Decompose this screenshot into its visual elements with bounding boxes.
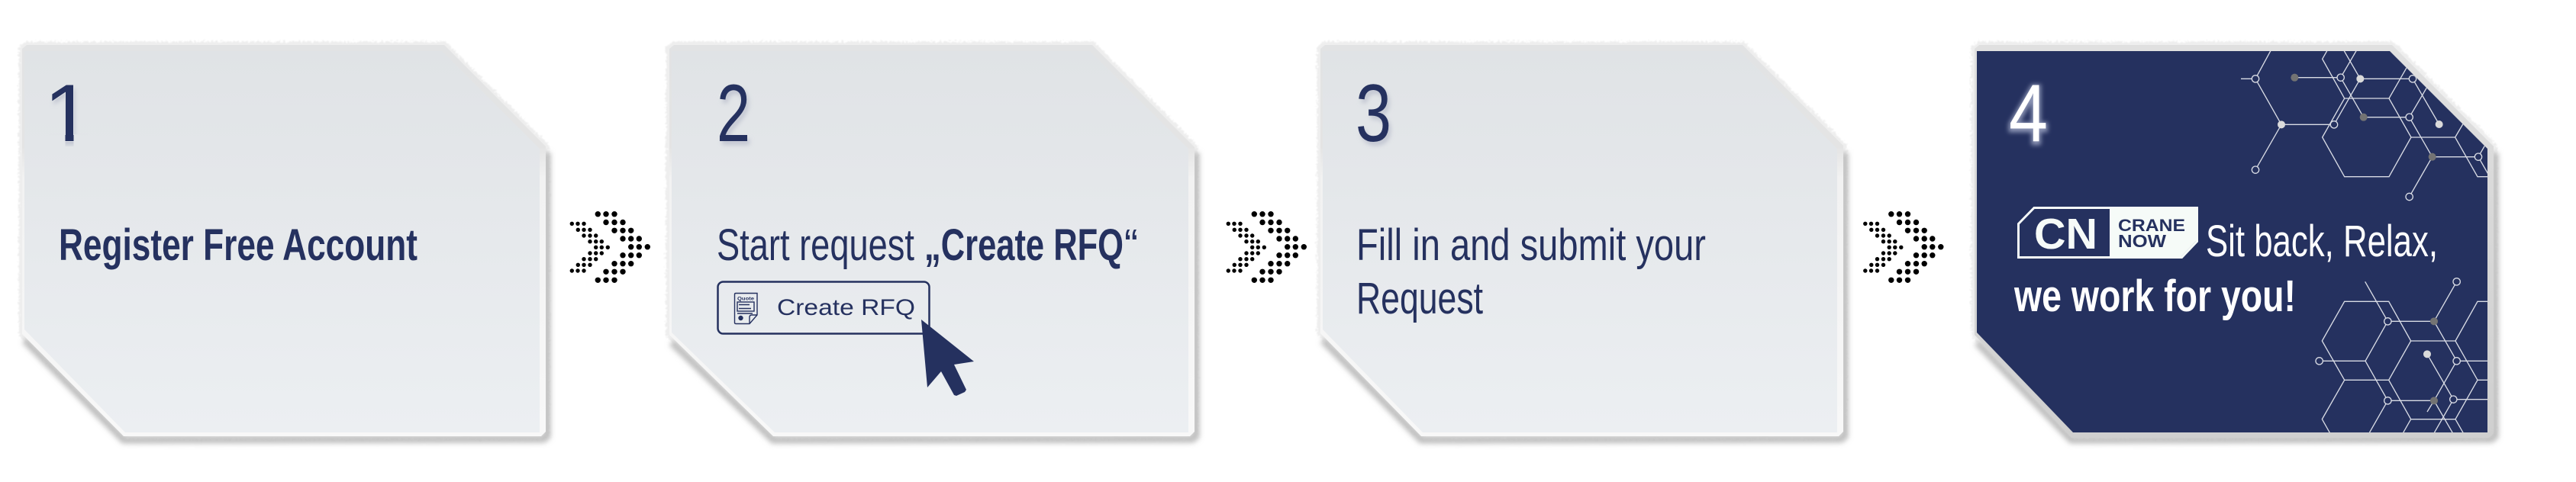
step number 1: 1 <box>44 67 92 159</box>
step number 1: 1 <box>46 71 93 162</box>
panel: step 3 <box>1320 45 1845 440</box>
icon: quote document <box>734 293 757 323</box>
step number 2: 2 <box>719 71 753 162</box>
step 3 text: Fill in and submit your <box>1356 220 1706 270</box>
logo: Crane Now: CN <box>2034 210 2097 259</box>
step 2 text: “ <box>1124 220 1138 270</box>
step number 3: 3 <box>1356 67 1391 159</box>
logo: Crane Now <box>2018 207 2197 259</box>
logo: Crane Now: NOW <box>2118 231 2166 251</box>
step number 4: 4 <box>2009 67 2048 159</box>
step 4 text <box>2013 217 2438 321</box>
step 2 text: „Create RFQ <box>924 220 1124 270</box>
logo: Crane Now: CRANE <box>2118 216 2185 235</box>
step 3 text: Request <box>1356 274 1483 323</box>
step 2 text <box>717 220 1138 270</box>
arrow: step 1 to 2 <box>570 211 650 283</box>
panel: step 1 <box>22 45 547 440</box>
network pattern: top right <box>2241 47 2494 441</box>
step 4 text: we work for you! <box>2013 272 2296 321</box>
arrow: step 2 to 3 <box>1227 211 1307 283</box>
panel: step 4 <box>1975 45 2495 441</box>
panel: step 2 <box>669 45 1196 440</box>
step 4 text: Sit back, Relax, <box>2206 217 2438 266</box>
step number 1 <box>52 85 76 146</box>
button: Create RFQ: Create RFQ <box>777 295 915 320</box>
icon: quote document: Quote <box>737 296 754 302</box>
button: Create RFQ <box>717 282 930 334</box>
arrow: step 3 to 4 <box>1863 211 1943 283</box>
step number 3: 3 <box>1358 71 1394 162</box>
step number 2: 2 <box>717 67 750 159</box>
network pattern: bottom right <box>2316 278 2494 441</box>
step 1 text: Register Free Account <box>59 220 418 270</box>
icon: mouse cursor <box>921 320 974 396</box>
step number 4: 4 <box>2009 69 2048 160</box>
step 2 text: Start request <box>717 220 914 270</box>
step 3 text <box>1356 220 1706 323</box>
